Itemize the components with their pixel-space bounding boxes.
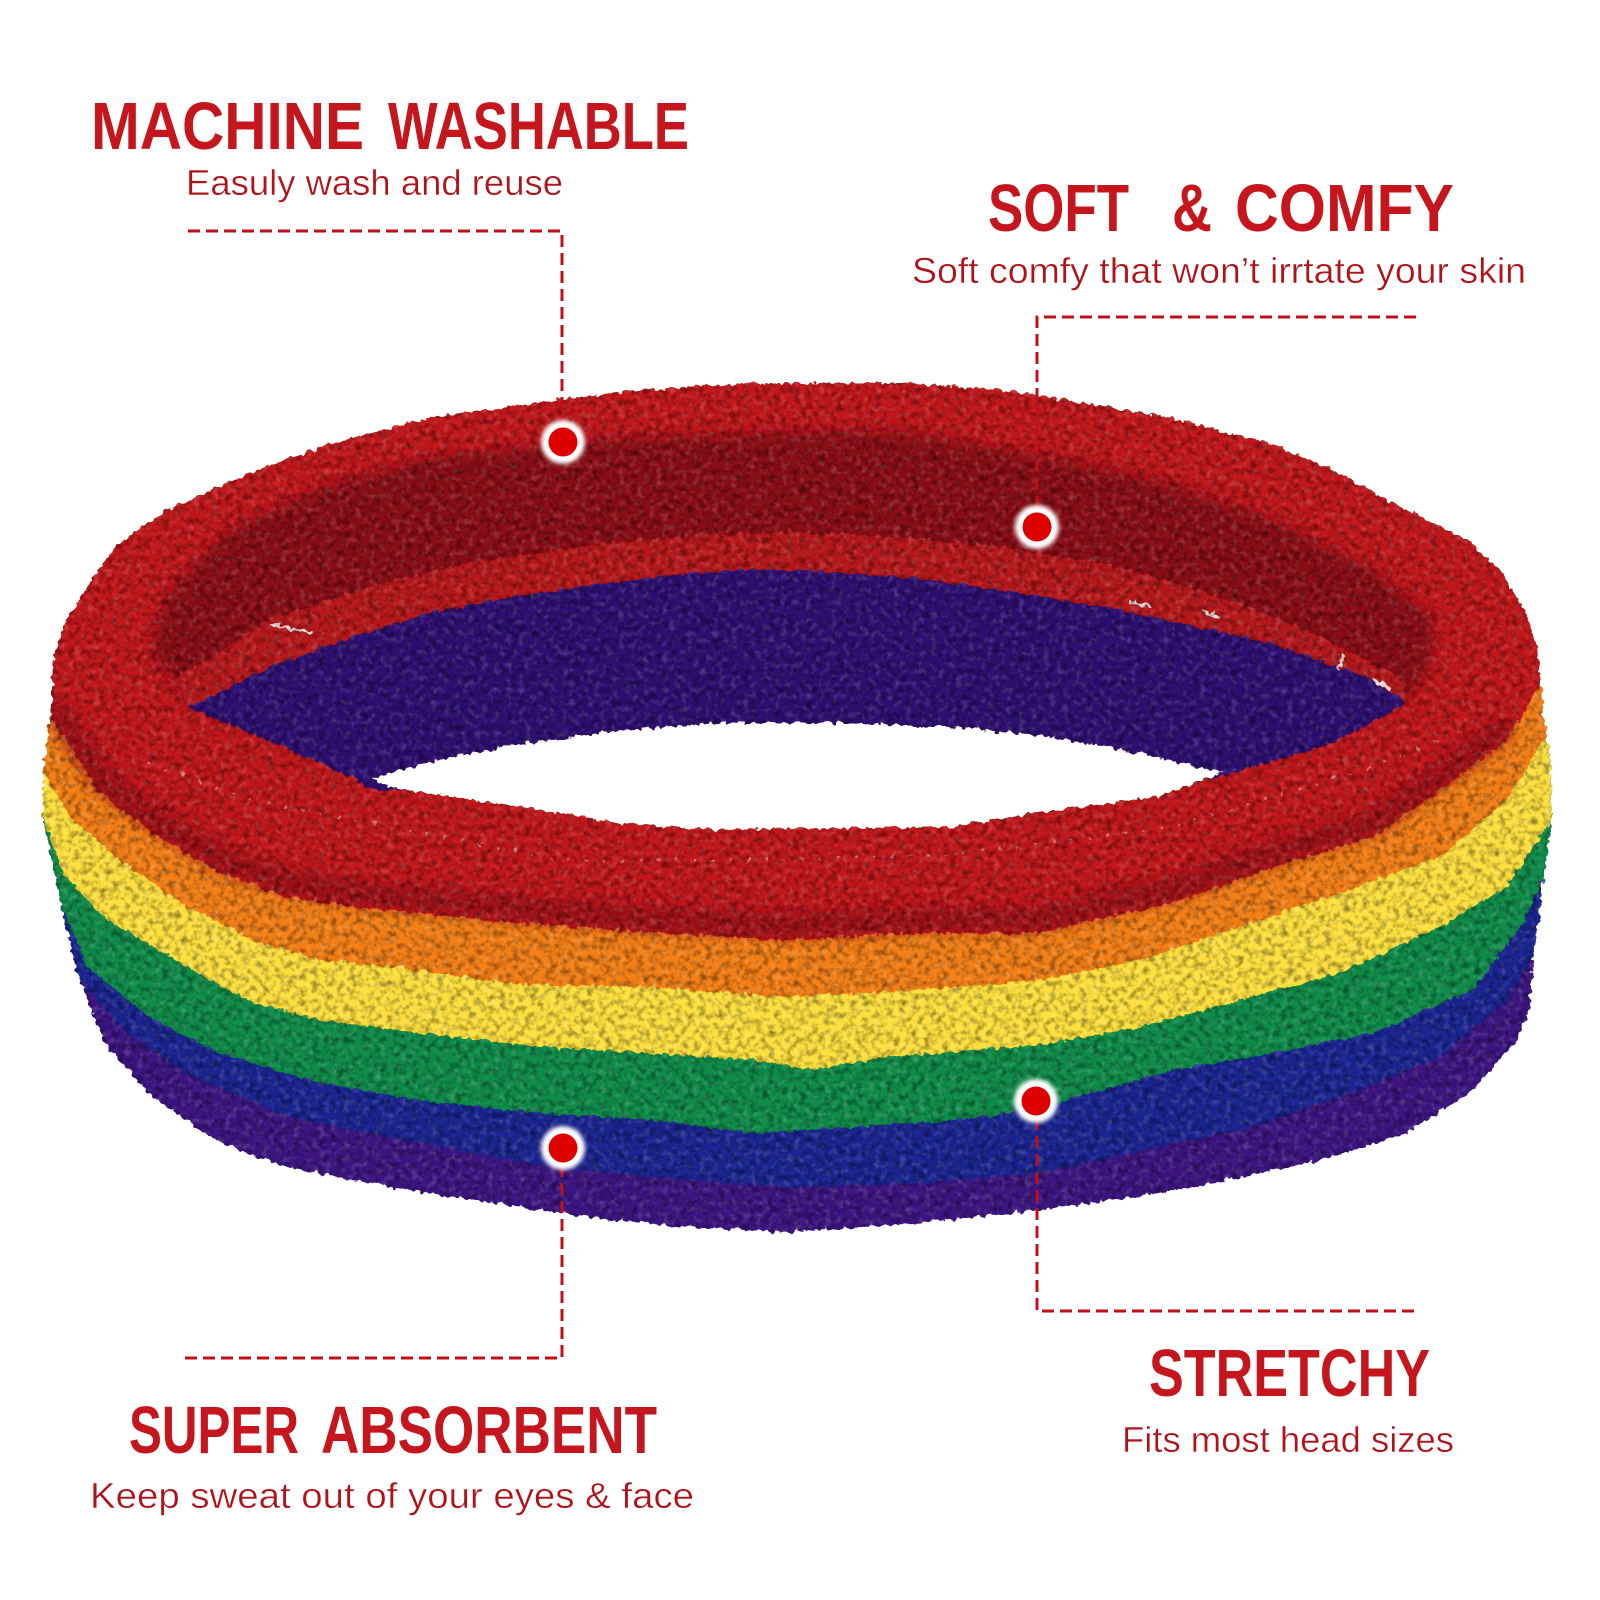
callout: soft and comfy [912,171,1526,549]
heading [129,1393,657,1468]
heading: WASHABLE [388,89,689,164]
heading: MACHINE [91,89,364,164]
inner wall: dark red [150,432,1433,777]
stripe: orange [42,382,1548,998]
rim stitching [147,740,1440,860]
leader line [185,1165,562,1358]
heading [91,89,689,164]
callout: machine washable [91,89,689,464]
leader line [188,231,562,425]
marker dot [541,420,585,464]
heading: & [1172,171,1212,246]
callout: super absorbent [90,1126,694,1516]
leader line [1037,1118,1416,1311]
heading: COMFY [1235,171,1454,246]
inner wall: purple [190,570,1407,790]
heading: SUPER [129,1393,299,1468]
stripe: blue [42,382,1553,1188]
stripe: purple [20,360,1580,1250]
callout: stretchy [1014,1079,1454,1460]
heading: SOFT [988,171,1129,246]
heading [988,171,1454,246]
stripe: red front rim [50,381,1542,942]
loose white threads [272,602,1388,688]
marker dot [541,1126,585,1170]
marker dot [1015,505,1059,549]
stripe: yellow [41,382,1553,1070]
subtext: Easuly wash and reuse [186,162,563,203]
subtext: Fits most head sizes [1122,1419,1454,1460]
leader line [1037,317,1416,510]
stripe: green [42,382,1553,1134]
heading: STRETCHY [1149,1336,1430,1411]
subtext: Keep sweat out of your eyes & face [90,1475,694,1516]
heading: ABSORBENT [321,1393,657,1468]
red rim shading [53,706,1507,926]
product photo: rainbow terry headband [41,381,1553,1234]
marker dot [1014,1079,1058,1123]
inner seam: red [170,532,1407,777]
subtext: Soft comfy that won’t irrtate your skin [912,250,1526,291]
